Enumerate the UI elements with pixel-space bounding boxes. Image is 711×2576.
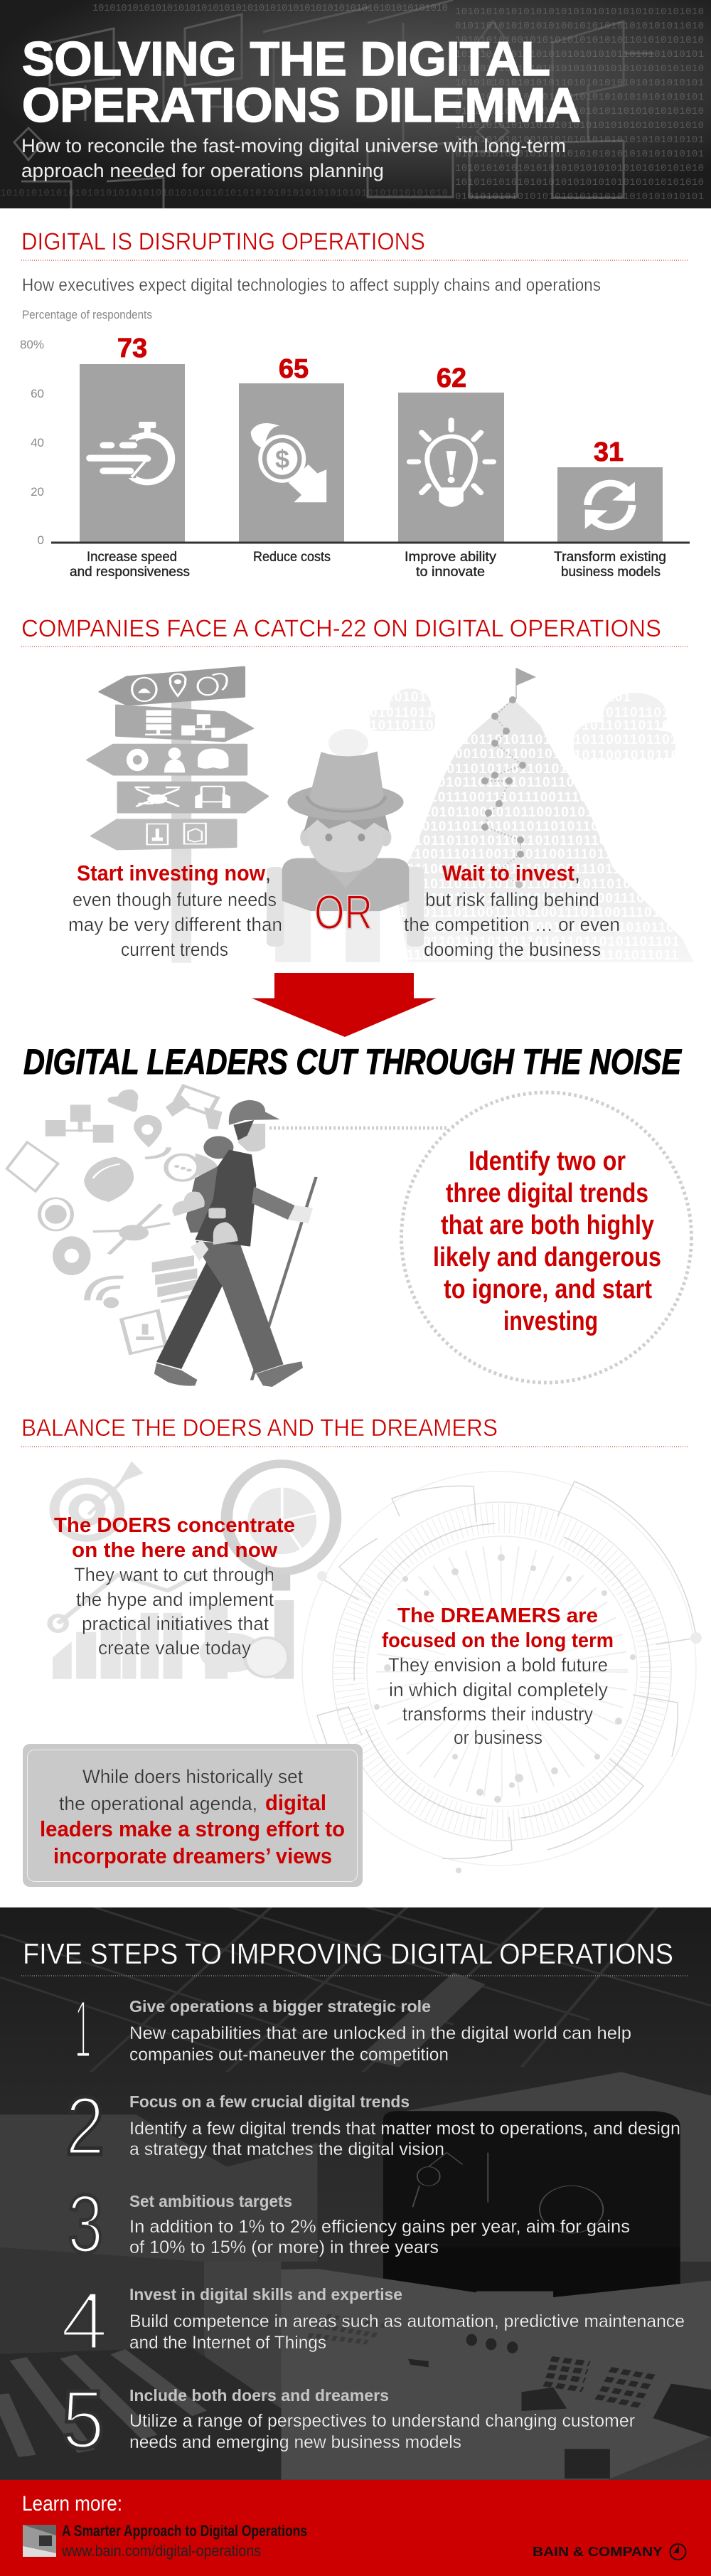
clouds: 0101101101 [370,706,451,720]
header background with binary pattern: 1010101010101010101010101010101010101010 [455,163,704,174]
step 5: 5 [62,2373,105,2466]
step 1: New capabilities that are unlocked in the digital world can help [129,2023,631,2043]
text: dreamers: The DREAMERS are [397,1604,598,1627]
backpack [186,1136,233,1233]
subtitle: How to reconcile the fast-moving digital universe with long-term [21,135,566,156]
text: wait to invest: the competition … or even [404,914,620,935]
header background with binary pattern: 101010101010101010101010101010101010101010101010101010101010101010101010 [0,188,448,199]
clouds [328,688,688,763]
head and cap [229,1100,280,1151]
bar labels: Reduce costs [253,550,331,565]
report link: A Smarter Approach to Digital Operations [62,2522,307,2540]
doers background icons [50,1461,336,1679]
step 4: and the Internet of Things [129,2333,326,2353]
values: 31 [594,437,624,467]
step 4: Invest in digital skills and expertise [129,2285,402,2304]
text: doers: on the here and now [72,1539,277,1562]
values: 73 [117,334,147,363]
torso [195,1150,256,1247]
mountain with binary digits: 11001110110011101100111011001110110 [398,905,676,920]
icon: server [152,1255,202,1303]
signpost [87,667,267,963]
icon: map pin [134,1115,169,1158]
callout circle: that are both highly [441,1210,654,1240]
mountain with binary digits [398,699,694,963]
mountain with binary digits: 00111011100111011100111011100111011 [398,790,675,805]
step 5: Utilize a range of perspectives to understand changing customer [129,2411,635,2431]
bar labels [70,550,666,580]
chart line [50,1572,204,1631]
header background with binary pattern: 1010101010101010101010101010101010101010 [455,120,704,132]
mountain with binary digits: 10101101101011011010110110101101101 [398,762,680,777]
bars [80,364,663,543]
header background with binary pattern: 0101010101010101010101010110101010101010 [455,106,704,117]
step 3: In addition to 1% to 2% efficiency gains per year, aim for gains [129,2217,630,2237]
callout circle: investing [503,1306,598,1336]
title: OPERATIONS DILEMMA [22,78,581,132]
mountain with binary digits: 10101101101011011010110110101101101 [398,834,680,848]
icon: folders [46,1105,113,1143]
axis title: Percentage of respondents [22,308,152,321]
step 4 [60,2274,685,2367]
text: doers: practical initiatives that [82,1613,269,1634]
step 2 [65,2080,680,2172]
step 1: 1 [75,1983,91,2075]
text: dreamers: They envision a bold future [388,1654,608,1676]
header background with binary pattern: 0101010100101010101010101010101010101010 [455,63,704,75]
icon: stopwatch [86,422,171,482]
header background with binary pattern [0,0,711,208]
callout circle [401,1092,691,1383]
dreamers radial graphic [302,1471,702,1873]
icon: tablet with hands [166,1086,223,1129]
mountain with binary digits: 10010101100101011001010110010101101 [398,920,683,935]
callout circle: three digital trends [446,1178,648,1208]
icon: falling dollar [251,423,326,502]
heading: BALANCE THE DOERS AND THE DREAMERS [21,1415,498,1442]
mountain with binary digits: 10110101101101011010110101101011010 [398,733,681,747]
y axis labels: 0 [38,533,44,547]
icon: magnifier with pie chart [227,1464,336,1591]
mountain with binary digits: 10010101100101011001010110010101100 [398,805,683,820]
clouds: 0101101101101 [574,718,678,733]
section: digital leaders [7,1042,691,1387]
callout box: leaders make a strong effort to [40,1816,345,1841]
header background with binary pattern: 1010101010101101010101010101010101010101 [455,92,704,103]
text: dreamers: or business [454,1727,542,1748]
chart subtitle: How executives expect digital technologies to affect supply chains and operations [22,275,601,295]
icon: chat bubbles [166,1154,219,1190]
text: start investing now: may be very different than [68,914,282,935]
text: wait to invest: dooming the business [424,939,601,960]
dollar sign: $ [275,445,289,474]
learn more: Learn more: [22,2492,122,2516]
icon: target [55,1476,127,1538]
factory background [0,1906,711,2480]
icon: globe [39,1198,72,1230]
bar labels: Transform existing [554,550,666,565]
y axis labels [20,338,44,547]
clouds: 1010101 [574,690,631,705]
subtitle: approach needed for operations planning [21,160,384,181]
digital trend icons [7,1086,223,1353]
icon: refresh arrows [585,482,635,529]
clouds: 1011011010 [370,718,451,733]
header background with binary pattern: 1010101010101010101010101010101010101010 [455,177,704,188]
title [22,32,581,132]
mountain with binary digits: 11011010110110101101101011011010110 [398,775,679,790]
header background with binary pattern: 1010101010010101010101010101101010101010 [455,35,704,46]
callout box: the operational agenda, [59,1793,257,1814]
step 2: Focus on a few crucial digital trends [129,2092,410,2111]
callout box: While doers historically set [82,1766,303,1787]
step 2: Identify a few digital trends that matter most to operations, and design [129,2119,680,2139]
step 3: 3 [68,2178,103,2270]
header background with binary pattern: 1010101010100101010101010101010101010101 [455,134,704,146]
callout circle: to ignore, and start [444,1274,652,1304]
sign 3 [87,745,246,775]
clouds: 110101101101 [574,706,670,720]
text: doers: the hype and implement [76,1589,274,1610]
mountain with binary digits: 01101011011010110110101101101011011 [398,948,679,963]
mountain with binary digits: 01100111011001110110011101100111011 [398,847,676,862]
y axis labels: 40 [31,436,44,449]
mountain with binary digits: 10101101101011011010110110101101101 [398,935,680,949]
header background with binary pattern: 0101010101010101010101010101010101010101 [455,149,704,160]
report thumbnail [23,2525,56,2557]
text: start investing now [68,861,282,960]
bar labels: and responsiveness [70,565,190,580]
arm and glove [252,1186,313,1223]
report link [61,2522,307,2560]
mountain with binary digits: 01010110010101100101011001010101001 [398,747,684,762]
character with hat [267,751,424,962]
text: dreamers: focused on the long term [382,1629,614,1652]
clouds: 10110011011011 [574,733,686,747]
footer [0,2480,711,2576]
callout box: incorporate dreamers’ views [53,1843,332,1868]
mountain with binary digits: 01101011011010110110101101101011011 [398,819,679,834]
bar labels: business models [561,565,661,580]
bar labels: to innovate [416,565,485,580]
bar labels: Improve ability [405,550,497,565]
step 3 [68,2178,630,2270]
segment frames [317,1481,696,1858]
step 2: 2 [65,2080,105,2172]
section: doers and dreamers [21,1415,702,1887]
text: doers [54,1514,295,1659]
icon: arrow fletching [119,1461,144,1483]
text: start investing now: Start investing now, [77,861,271,885]
sign 1 [100,667,244,705]
bar labels: Increase speed [87,550,177,565]
header background with binary pattern: 1010101010101010101010101010101010101010 [455,6,704,18]
icon: disc [53,1236,91,1275]
step 1: Give operations a bigger strategic role [129,1997,431,2016]
text: wait to invest: but risk falling behind [425,889,599,910]
section: digital is disrupting operations [20,228,690,580]
icon: light bulb [410,420,493,507]
legs [156,1241,284,1374]
sign 4 [118,782,267,812]
clouds: 10110010101101 [574,748,688,763]
header background with binary pattern: 0101101010101010100101010101010101011010 [455,21,704,32]
text: dreamers: in which digital completely [389,1679,608,1701]
y axis labels: 60 [31,387,44,400]
step 5: Include both doers and dreamers [129,2386,389,2405]
arrow: down [252,973,437,1037]
text: wait to invest [404,861,620,960]
dotted sightline [269,1127,449,1129]
report link: www.bain.com/digital-operations [61,2542,261,2560]
heading: COMPANIES FACE A CATCH-22 ON DIGITAL OPERATIONS [21,615,661,642]
step 5 [62,2373,635,2466]
walking pole [252,1177,316,1380]
step 5: needs and emerging new business models [129,2432,461,2452]
section: catch-22 [21,615,694,1037]
text: dreamers: transforms their industry [402,1703,593,1725]
callout circle: Identify two or [469,1146,626,1176]
clouds: 1010101 [370,690,427,705]
callout box: digital [265,1790,326,1815]
step 1 [75,1983,631,2075]
section: five steps [0,1906,711,2480]
shoes [154,1361,303,1387]
bar chart [20,334,690,580]
icon: vr headset [84,1157,134,1202]
callout circle: likely and dangerous [433,1242,661,1272]
mountain with binary digits: 10011101100111011001110110011101100 [398,891,677,906]
text: wait to invest: Wait to invest, [442,861,580,885]
values: 65 [279,354,309,384]
values: 62 [437,363,466,393]
hiker [154,1100,316,1387]
callout box [23,1744,363,1887]
values [117,334,624,467]
step 1: companies out-maneuver the competition [129,2045,449,2065]
flag and trail [481,668,536,888]
y axis labels: 20 [31,485,44,499]
text: start investing now: current trends [121,939,228,960]
text: doers: The DOERS concentrate [54,1514,295,1537]
step 4: 4 [60,2274,108,2367]
title: SOLVING THE DIGITAL [22,32,550,86]
header banner [0,0,711,208]
text: or: OR [314,885,373,940]
icon: drone [93,1204,170,1254]
text: start investing now: even though future needs [73,889,277,910]
header background with binary pattern: 1010101010101010110101010101010101010101 [455,78,704,89]
step 4: Build competence in areas such as automation, predictive maintenance [129,2311,685,2331]
subtitle [21,135,566,181]
step 3: Set ambitious targets [129,2192,292,2210]
bain logo [533,2544,685,2560]
mountain with binary digits: 10110011101100111011001110110011101 [398,862,677,877]
heading: DIGITAL IS DISRUPTING OPERATIONS [21,228,425,255]
icon: 3d window [7,1142,58,1191]
icon: growth chart and coins [53,1600,294,1679]
bain logo: BAIN & COMPANY [533,2545,663,2559]
step 2: a strategy that matches the digital vision [129,2139,444,2159]
sign 5 [92,820,236,849]
text: doers: create value today [98,1637,251,1659]
text: dreamers [382,1604,614,1748]
icon: cloud [107,1090,138,1112]
header background with binary pattern: 1010101010101010101010101011010101010101 [455,49,704,60]
header background with binary pattern: 10101010101010101010101010101010101010101010101010101010101010 [92,3,448,14]
header background with binary pattern: 0101010101010101010101010101010101010101 [455,191,704,203]
icon: wifi [87,1277,123,1306]
text: doers: They want to cut through [74,1564,274,1585]
y axis labels: 80% [20,338,44,351]
sign 2 [117,706,252,741]
step 3: of 10% to 15% (or more) in three years [129,2237,439,2257]
icon: 3d printer [122,1311,166,1353]
icons held by hiker [172,1191,238,1261]
mountain with binary digits: 11010110110101101101011011010110110 [398,877,679,892]
heading: FIVE STEPS TO IMPROVING DIGITAL OPERATIONS [23,1937,673,1970]
